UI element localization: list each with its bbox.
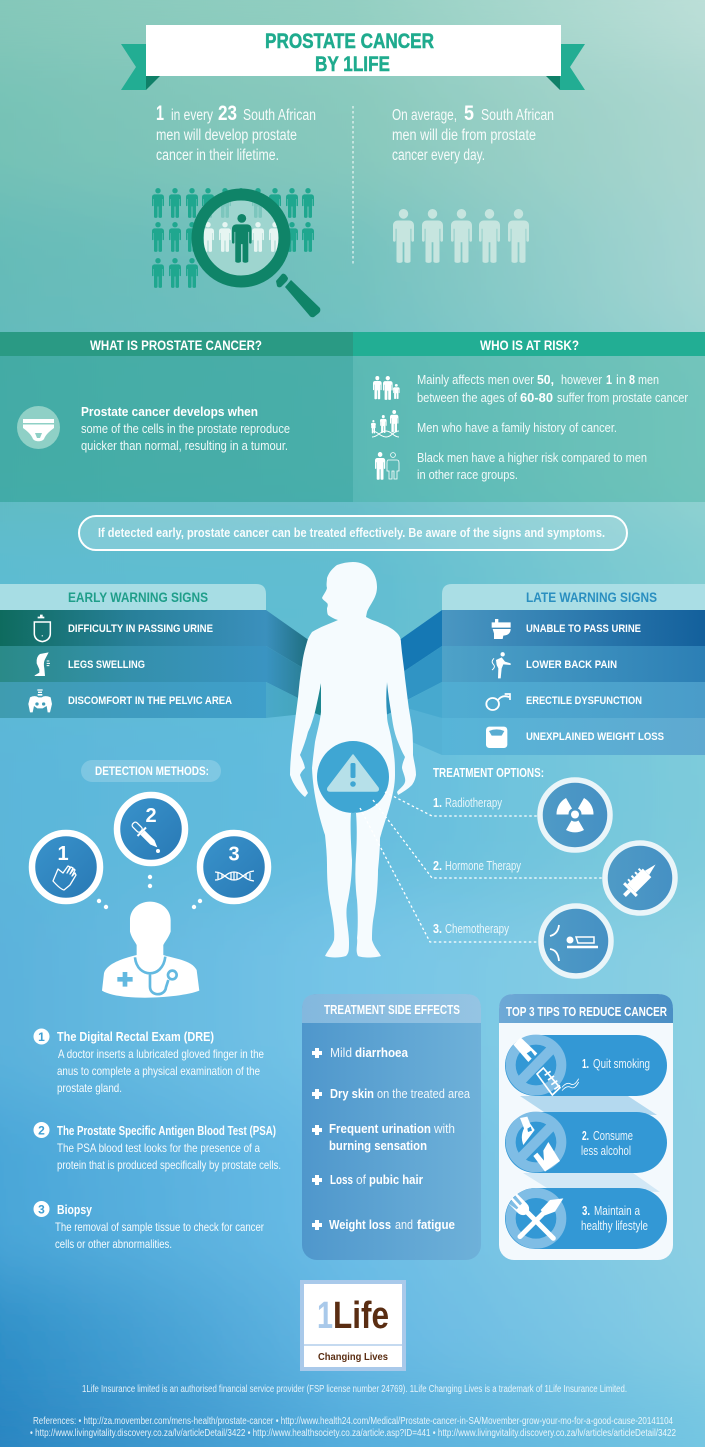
- effect: hair loss: pubic hair: [369, 1172, 423, 1187]
- heading: what is prostate cancer: WHAT IS PROSTATE CANCER?: [90, 338, 262, 353]
- dotted connector lines: [360, 792, 603, 942]
- effect: dry skin: on the treated area: [377, 1086, 471, 1101]
- panel: early warning signs: [0, 584, 322, 718]
- sign: discomfort in the pelvic area: [0, 682, 266, 718]
- text: age risk: [417, 373, 688, 405]
- panel: late warning signs: [384, 584, 705, 755]
- text: race risk: Black men have a higher risk compared to men: [417, 451, 647, 465]
- sign: difficulty in passing urine: [0, 610, 266, 646]
- logo: 1Life Changing Lives: [300, 1280, 406, 1371]
- text: age risk: 8: [629, 373, 635, 387]
- heading: late warning signs: LATE WARNING SIGNS: [526, 590, 657, 605]
- text: age risk: suffer from prostate cancer: [557, 391, 688, 405]
- callout: early detection: [79, 516, 627, 550]
- icon: two men: [375, 452, 399, 480]
- effect: frequent urination: burning sensation: [329, 1138, 427, 1153]
- treatment: chemotherapy: Chemotherapy: [445, 922, 510, 936]
- effect: mild diarrhoea: Mild: [330, 1045, 352, 1060]
- method 2: psa blood test: The PSA blood test looks for the presence of a: [57, 1141, 260, 1155]
- statistic: 1 in 23 text: men will develop prostate: [156, 127, 297, 144]
- method 1: digital rectal exam: A doctor inserts a lubricated gloved finger in the: [58, 1047, 264, 1061]
- effect: frequent urination: Frequent urination: [329, 1121, 431, 1136]
- tip 3: healthy lifestyle: [505, 1188, 667, 1249]
- text: definition: some of the cells in the prostate reproduce: [81, 422, 290, 436]
- panel: top 3 tips: [499, 994, 673, 1260]
- tip 3: healthy lifestyle: Maintain a: [594, 1203, 641, 1218]
- statistic: 1 in 23 text: cancer in their lifetime.: [156, 147, 279, 164]
- sign: unable to pass urine: [442, 610, 705, 646]
- tip 2: less alcohol: less alcohol: [581, 1143, 631, 1158]
- connector bands to body: [266, 610, 322, 718]
- heading: early warning signs: [0, 584, 266, 610]
- text: age risk: 60-80: [520, 391, 553, 405]
- statistic: 5 per day text: [392, 102, 554, 164]
- method 1: digital rectal exam: [34, 1028, 264, 1095]
- tip 2: less alcohol: 2.: [582, 1128, 589, 1143]
- icon: patient under scanner: [550, 925, 598, 961]
- icon: warning symbol: [317, 741, 389, 813]
- title: [265, 30, 434, 76]
- text: age risk: 50,: [537, 373, 554, 387]
- method 1: digital rectal exam: The Digital Rectal Exam (DRE): [57, 1030, 214, 1044]
- icon: family: [373, 376, 400, 400]
- connector bands to body: [384, 610, 442, 755]
- statistic: 1 in 23 text: South African: [243, 107, 316, 124]
- icon: radiation: [556, 798, 594, 832]
- five men icons: [393, 209, 529, 263]
- logo: 1Life Changing Lives: Life: [333, 1295, 389, 1337]
- tip 1: quit smoking: Quit smoking: [593, 1056, 650, 1071]
- effect: weight loss: and: [395, 1217, 413, 1232]
- effect: frequent urination: with: [433, 1121, 455, 1136]
- detection circle 3: dna: [200, 833, 268, 901]
- tip 3: healthy lifestyle: healthy lifestyle: [581, 1218, 648, 1233]
- text: age risk: however: [561, 373, 602, 387]
- statistic: 5 per day text: cancer every day.: [392, 147, 485, 164]
- method 1: digital rectal exam: 1: [38, 1030, 45, 1044]
- icon: knife and fork: [508, 1193, 563, 1244]
- text: age risk: men: [638, 373, 659, 387]
- title: BY 1LIFE: [315, 53, 390, 76]
- logo: 1Life Changing Lives: 1: [317, 1295, 333, 1337]
- text: race risk: in other race groups.: [417, 468, 518, 482]
- text: age risk: in: [616, 373, 626, 387]
- method 1: digital rectal exam: prostate gland.: [57, 1081, 122, 1095]
- tip 1: quit smoking: 1.: [582, 1056, 589, 1071]
- treatment: hormone therapy: 2.: [433, 859, 442, 873]
- statistic: 1 in 23 text: in every: [171, 107, 213, 124]
- method 1: digital rectal exam: anus to complete a physical examination of the: [57, 1064, 260, 1078]
- statistic: 5 per day text: South African: [481, 107, 554, 124]
- text: age risk: Mainly affects men over: [417, 373, 534, 387]
- heading: side effects: TREATMENT SIDE EFFECTS: [324, 1003, 460, 1017]
- effect: dry skin: Dry skin: [330, 1086, 374, 1101]
- text: family history: Men who have a family history of cancer.: [417, 421, 617, 435]
- statistic: 5 per day text: men will die from prostate: [392, 127, 536, 144]
- sign: legs swelling: [0, 646, 266, 682]
- method 3: biopsy: The removal of sample tissue to check for cancer: [55, 1220, 264, 1234]
- icon: family history dna: [371, 410, 399, 437]
- sign: lower back pain: LOWER BACK PAIN: [526, 659, 617, 671]
- statistic: 1 in 23 text: 1: [156, 102, 164, 125]
- callout: early detection: If detected early, prostate cancer can be treated effectively. Be aware of the signs and symptoms.: [98, 525, 605, 540]
- effect: weight loss: Weight loss: [329, 1217, 391, 1232]
- method 3: biopsy: cells or other abnormalities.: [55, 1237, 172, 1251]
- treatment: hormone therapy: [433, 843, 675, 913]
- heading: treatment options: TREATMENT OPTIONS:: [433, 766, 544, 780]
- tip 2: less alcohol: Consume: [593, 1128, 633, 1143]
- effect: frequent urination: [312, 1121, 455, 1153]
- detection circle 1: hand: [32, 833, 100, 901]
- logo: 1Life Changing Lives: Changing Lives: [318, 1351, 388, 1363]
- method 2: psa blood test: [34, 1122, 281, 1172]
- text: definition: [81, 405, 290, 453]
- statistic: 1 in 23 text: [156, 102, 316, 164]
- icon: gloved hand: [53, 866, 76, 890]
- panel: treatment side effects: [302, 994, 481, 1260]
- effect: weight loss: [312, 1217, 455, 1232]
- tip 1: quit smoking: [505, 1035, 667, 1096]
- text: age risk: 1: [606, 373, 612, 387]
- effect: weight loss: fatigue: [417, 1217, 455, 1232]
- icon: dna helix: [215, 871, 254, 881]
- effect: hair loss: of: [356, 1172, 366, 1187]
- detection methods label: DETECTION METHODS:: [95, 764, 209, 778]
- detection circle 2: dropper: 2: [145, 805, 157, 827]
- heading: late warning signs: [442, 584, 705, 610]
- method 3: biopsy: [34, 1201, 264, 1251]
- method 3: biopsy: Biopsy: [57, 1203, 92, 1217]
- sign: erectile dysfunction: [442, 682, 705, 718]
- heading: what is prostate cancer: [0, 332, 353, 356]
- treatment: radiotherapy: 1.: [433, 796, 442, 810]
- effect: mild diarrhoea: diarrhoea: [355, 1045, 409, 1060]
- detection methods label: [81, 760, 221, 782]
- sign: legs swelling: LEGS SWELLING: [68, 659, 145, 671]
- detection circle 1: hand: 1: [57, 843, 69, 865]
- footer: references: [30, 1416, 676, 1439]
- text: race risk: [417, 451, 647, 482]
- heading: side effects: [302, 994, 481, 1023]
- sign: unexplained weight loss: [442, 718, 705, 755]
- method 2: psa blood test: protein that is produced specifically by prostate cells.: [57, 1158, 281, 1172]
- tip 3: healthy lifestyle: 3.: [582, 1203, 590, 1218]
- icon: no smoking: [511, 1037, 579, 1095]
- treatment: radiotherapy: Radiotherapy: [445, 796, 503, 810]
- icon: underwear: [17, 406, 60, 449]
- sign: lower back pain: [442, 646, 705, 682]
- effect: hair loss: [312, 1172, 423, 1187]
- title: PROSTATE CANCER: [265, 30, 434, 53]
- method 3: biopsy: 3: [38, 1202, 45, 1216]
- method 2: psa blood test: 2: [38, 1124, 45, 1138]
- text: definition: quicker than normal, resulting in a tumour.: [81, 439, 288, 453]
- treatment: radiotherapy: [433, 780, 610, 850]
- icon: syringe: [618, 858, 662, 902]
- sign: difficulty in passing urine: DIFFICULTY IN PASSING URINE: [68, 623, 213, 635]
- people grid with magnifying glass: [152, 188, 320, 317]
- panel: what is prostate cancer: [0, 332, 353, 502]
- sign: unable to pass urine: UNABLE TO PASS URINE: [526, 623, 641, 635]
- human body silhouette: [290, 562, 416, 958]
- text: definition: Prostate cancer develops when: [81, 405, 258, 419]
- icon: no alcohol: [511, 1117, 561, 1172]
- heading: top tips: TOP 3 TIPS TO REDUCE CANCER: [506, 1005, 667, 1019]
- dots from doctor to circles: [97, 875, 202, 909]
- effect: hair loss: Loss: [330, 1172, 353, 1187]
- icon: dropper: [129, 819, 162, 852]
- heading: who is at risk: WHO IS AT RISK?: [480, 338, 579, 353]
- panel: who is at risk: [353, 332, 705, 502]
- tip 2: less alcohol: [505, 1112, 667, 1173]
- method 2: psa blood test: The Prostate Specific Antigen Blood Test (PSA): [57, 1124, 276, 1138]
- sign: erectile dysfunction: ERECTILE DYSFUNCTION: [526, 695, 642, 707]
- heading: early warning signs: EARLY WARNING SIGNS: [68, 590, 208, 605]
- statistic: 5 per day text: 5: [464, 102, 474, 125]
- treatment: hormone therapy: Hormone Therapy: [445, 859, 522, 873]
- treatment: chemotherapy: 3.: [433, 922, 442, 936]
- text: age risk: between the ages of: [417, 391, 517, 405]
- statistic: 1 in 23 text: 23: [218, 102, 237, 125]
- treatment: chemotherapy: [433, 906, 611, 976]
- icon: doctor with stethoscope: [102, 902, 199, 998]
- sign: discomfort in the pelvic area: DISCOMFORT IN THE PELVIC AREA: [68, 695, 232, 707]
- effect: mild diarrhoea: [312, 1045, 409, 1060]
- sign: unexplained weight loss: UNEXPLAINED WEIGHT LOSS: [526, 731, 664, 743]
- detection circle 3: dna: 3: [228, 844, 240, 866]
- detection circle 2: dropper: [117, 795, 185, 863]
- statistic: 5 per day text: On average,: [392, 107, 457, 124]
- heading: top tips: [499, 994, 673, 1023]
- effect: dry skin: [312, 1086, 471, 1101]
- title ribbon: [121, 25, 585, 90]
- heading: who is at risk: [353, 332, 705, 356]
